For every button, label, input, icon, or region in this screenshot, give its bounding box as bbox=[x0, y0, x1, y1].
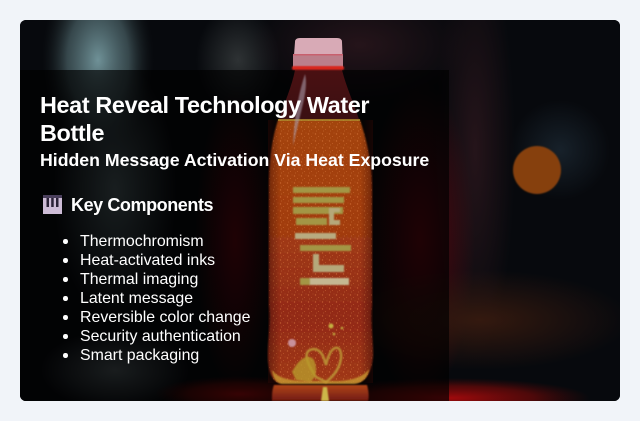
bottle base rim glow bbox=[272, 369, 369, 384]
liquid edge shading bbox=[268, 120, 373, 383]
list: key components: Heat-activated inks bbox=[80, 252, 215, 269]
bubbles bbox=[268, 120, 373, 383]
hidden message glyphs bbox=[293, 187, 351, 285]
list: key components: Thermochromism bbox=[80, 233, 204, 250]
pale spot bbox=[288, 339, 296, 347]
heart shape at bottle base bbox=[292, 348, 341, 382]
list: key components: Latent message bbox=[80, 290, 193, 307]
background orange light orb bbox=[513, 146, 561, 194]
bottle upper glass bbox=[278, 70, 360, 122]
bottle liquid bbox=[268, 120, 373, 383]
liquid surface line bbox=[278, 119, 360, 121]
cap bbox=[293, 38, 343, 68]
subtitle: Hidden Message Activation Via Heat Exposure bbox=[40, 150, 429, 170]
list: key components: Reversible color change bbox=[80, 309, 250, 326]
icon: piano keys bbox=[43, 195, 62, 214]
red glow neck ring bbox=[292, 66, 344, 70]
heading: key components: Key Components bbox=[71, 195, 213, 215]
list: key components: Smart packaging bbox=[80, 347, 199, 364]
panel: text backdrop bbox=[20, 70, 449, 401]
title bbox=[40, 92, 370, 146]
title: Heat Reveal Technology Water bbox=[40, 92, 369, 118]
bottle reflection bbox=[272, 385, 369, 401]
title: Bottle bbox=[40, 120, 104, 146]
list: key components: Thermal imaging bbox=[80, 271, 198, 288]
list: key components bbox=[63, 233, 250, 364]
sparkles bbox=[328, 324, 343, 335]
list: key components: Security authentication bbox=[80, 328, 241, 345]
bottle highlight bbox=[293, 74, 306, 146]
